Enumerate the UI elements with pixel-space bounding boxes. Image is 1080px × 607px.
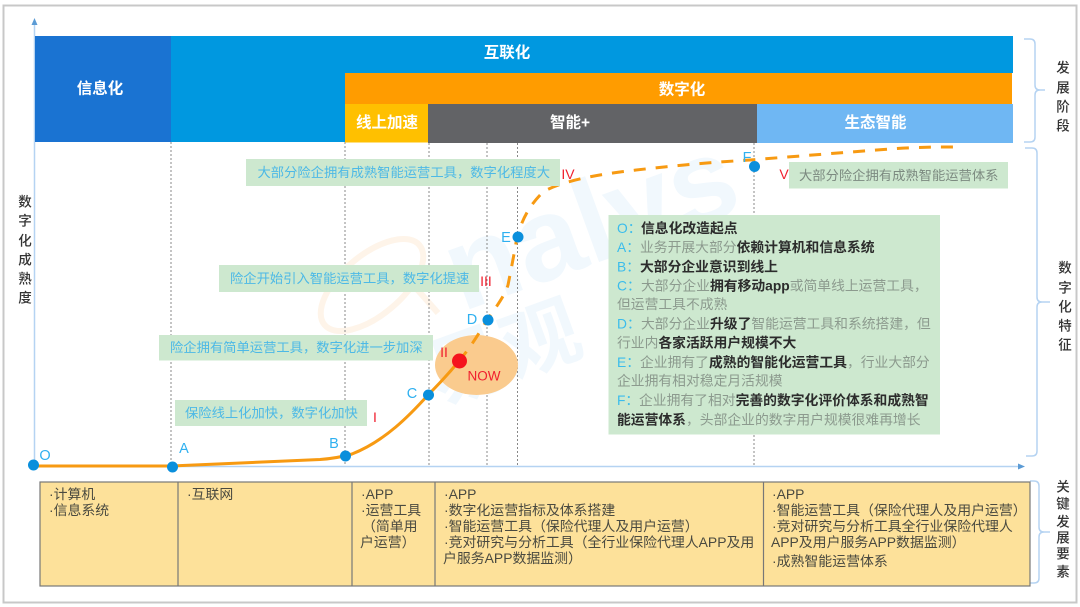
panel: point descriptions: 升级了智能运营工具和系统搭建，但 <box>710 316 931 331</box>
panel: point descriptions: 信息化改造起点 <box>641 220 738 236</box>
label: 数字化特征: 征 <box>1058 338 1072 352</box>
band: 生态智能 <box>757 104 1013 143</box>
column 2: ·互联网 <box>187 486 233 502</box>
callout IV: 大部分险企拥有成熟智能运营工具，数字化程度大 <box>258 164 550 180</box>
callout I: 保险线上化加快，数字化加快 <box>185 406 358 420</box>
column 5: ·APP <box>772 486 804 502</box>
phase labels <box>373 166 789 425</box>
label: 数字化特征: 特 <box>1058 318 1072 334</box>
phase labels: III <box>480 273 492 289</box>
column 4 <box>443 486 754 566</box>
band: 线上加速 <box>345 104 428 142</box>
axis title: 数字化成熟度: 度 <box>18 290 32 306</box>
watermark: nalys <box>426 109 754 336</box>
bracket: 数字化特征 <box>1025 148 1050 456</box>
band: 数字化 <box>345 73 1012 104</box>
panel: point descriptions: 业务开展大部分 <box>640 240 737 254</box>
maturity curve <box>33 147 957 466</box>
panel: point descriptions: B： <box>617 259 640 274</box>
column 4: ·数字化运营指标及体系搭建 <box>444 502 615 518</box>
label: 发展阶段: 段 <box>1056 118 1070 134</box>
callout V <box>789 162 1008 188</box>
point labels: A <box>179 441 189 457</box>
development stage bands <box>35 36 1013 143</box>
panel: point descriptions: 但运营工具不成熟 <box>617 297 728 312</box>
panel: point descriptions: 大部分企业 <box>641 315 710 331</box>
band: 智能+: 智能+ <box>550 112 590 132</box>
label: 关键发展要素 <box>1056 480 1070 580</box>
column 5 <box>771 486 1027 569</box>
column 3: ·运营工具 <box>361 502 421 518</box>
label: 关键发展要素: 发 <box>1056 514 1070 530</box>
column 1 <box>49 486 109 518</box>
table: key development factors <box>40 482 1030 586</box>
label: 发展阶段 <box>1056 60 1070 134</box>
column 4: ·APP <box>444 486 476 502</box>
panel: point descriptions: 大部分企业 <box>641 277 710 293</box>
band: 互联化 <box>171 36 1013 142</box>
axis title: 数字化成熟度: 化 <box>18 234 32 248</box>
panel: point descriptions: A： <box>617 240 640 254</box>
column 3: （简单用 <box>362 518 418 534</box>
bracket: 发展阶段 <box>1024 39 1045 142</box>
callout IV <box>246 159 560 186</box>
point labels: B <box>329 436 339 452</box>
label: 数字化特征: 化 <box>1058 300 1072 314</box>
axis title: 数字化成熟度: 熟 <box>18 270 32 286</box>
label: 数字化特征: 字 <box>1058 280 1072 296</box>
panel: point descriptions: O： <box>617 220 642 236</box>
band: 信息化 <box>35 36 171 142</box>
panel: point descriptions: 依赖计算机和信息系统 <box>737 238 875 254</box>
callout I <box>175 400 367 426</box>
phase labels: IV <box>561 166 575 182</box>
label: 数字化特征: 数 <box>1058 260 1072 276</box>
column 5: ·竞对研究与分析工具全行业保险代理人 <box>772 518 1013 534</box>
panel: point descriptions: 拥有移动app或简单线上运营工具， <box>710 278 928 293</box>
panel: point descriptions: 企业拥有了相对 <box>639 392 736 408</box>
axis title: 数字化成熟度: 成 <box>18 252 32 268</box>
column 3: ·APP <box>361 486 393 502</box>
point labels: E <box>501 230 511 246</box>
y axis <box>32 18 38 466</box>
panel: point descriptions: 企业拥有了 <box>640 354 709 370</box>
panel: point descriptions <box>608 215 940 434</box>
point labels: O <box>39 448 51 464</box>
band: 互联化: 互联化 <box>484 42 531 62</box>
point labels <box>39 150 752 464</box>
column 1: ·计算机 <box>49 486 95 502</box>
panel: point descriptions: F： <box>617 392 639 408</box>
panel: point descriptions: 行业内各家活跃用户规模不大 <box>617 334 797 350</box>
x axis <box>34 464 1025 470</box>
label: 关键发展要素: 素 <box>1056 564 1070 580</box>
phase labels: II <box>440 344 448 360</box>
column 4: ·竞对研究与分析工具（全行业保险代理人APP及用 <box>444 534 754 550</box>
band: 数字化: 数字化 <box>659 80 706 98</box>
point labels: F <box>743 150 752 166</box>
label: 数字化特征 <box>1058 260 1072 352</box>
current position highlight <box>435 335 518 395</box>
band: 生态智能: 生态智能 <box>844 112 907 132</box>
callout III: 险企开始引入智能运营工具，数字化提速 <box>230 270 469 286</box>
watermark: 易观 <box>416 285 592 421</box>
label: 发展阶段: 阶 <box>1056 100 1070 114</box>
label: 关键发展要素: 展 <box>1056 530 1070 546</box>
axis title: 数字化成熟度: 数 <box>18 194 32 210</box>
phase labels: I <box>373 409 377 425</box>
axis title: 数字化成熟度: 字 <box>18 212 32 228</box>
panel: point descriptions: C： <box>617 278 641 293</box>
label: 关键发展要素: 键 <box>1056 496 1070 512</box>
watermark <box>305 109 754 421</box>
panel: point descriptions: 完善的数字化评价体系和成熟智 <box>736 392 929 408</box>
callout II: 险企拥有简单运营工具，数字化进一步加深 <box>170 339 423 355</box>
band: 智能+ <box>428 104 757 143</box>
column 5: ·智能运营工具（保险代理人及用户运营） <box>772 502 1027 518</box>
callout V: 大部分险企拥有成熟智能运营体系 <box>799 167 998 183</box>
callout III <box>219 265 479 292</box>
panel: point descriptions: 能运营体系，头部企业的数字用户规模很难再增长 <box>617 411 921 427</box>
label: 发展阶段: 展 <box>1056 80 1070 96</box>
panel: point descriptions: 企业拥有相对稳定月活规模 <box>617 372 783 388</box>
callout II <box>159 335 433 360</box>
panel: point descriptions: D： <box>617 316 641 331</box>
phase labels: V <box>779 166 789 182</box>
band: 信息化: 信息化 <box>77 78 124 98</box>
column 5: ·成熟智能运营体系 <box>772 553 888 569</box>
column 3 <box>360 486 421 550</box>
column 4: ·智能运营工具（保险代理人及用户运营） <box>444 518 699 534</box>
panel: point descriptions: E： <box>617 354 640 370</box>
column 3: 户运营） <box>360 534 416 550</box>
panel: point descriptions: 大部分企业意识到线上 <box>640 258 778 274</box>
column 4: 户服务APP数据监测） <box>443 550 582 566</box>
column 5: APP及用户服务APP数据监测） <box>771 534 966 550</box>
band: 线上加速: 线上加速 <box>356 112 418 132</box>
point labels: C <box>407 386 417 402</box>
point labels: D <box>467 312 477 328</box>
NOW label: NOW <box>468 368 501 384</box>
axis title: 数字化成熟度 <box>18 194 32 306</box>
column 1: ·信息系统 <box>49 502 109 518</box>
bracket: 关键发展要素 <box>1030 481 1050 583</box>
curve points <box>28 161 760 472</box>
label: 关键发展要素: 关 <box>1056 480 1070 494</box>
label: 关键发展要素: 要 <box>1056 546 1070 562</box>
panel: point descriptions: 成熟的智能化运营工具，行业大部分 <box>709 354 930 370</box>
label: 发展阶段: 发 <box>1056 60 1070 76</box>
